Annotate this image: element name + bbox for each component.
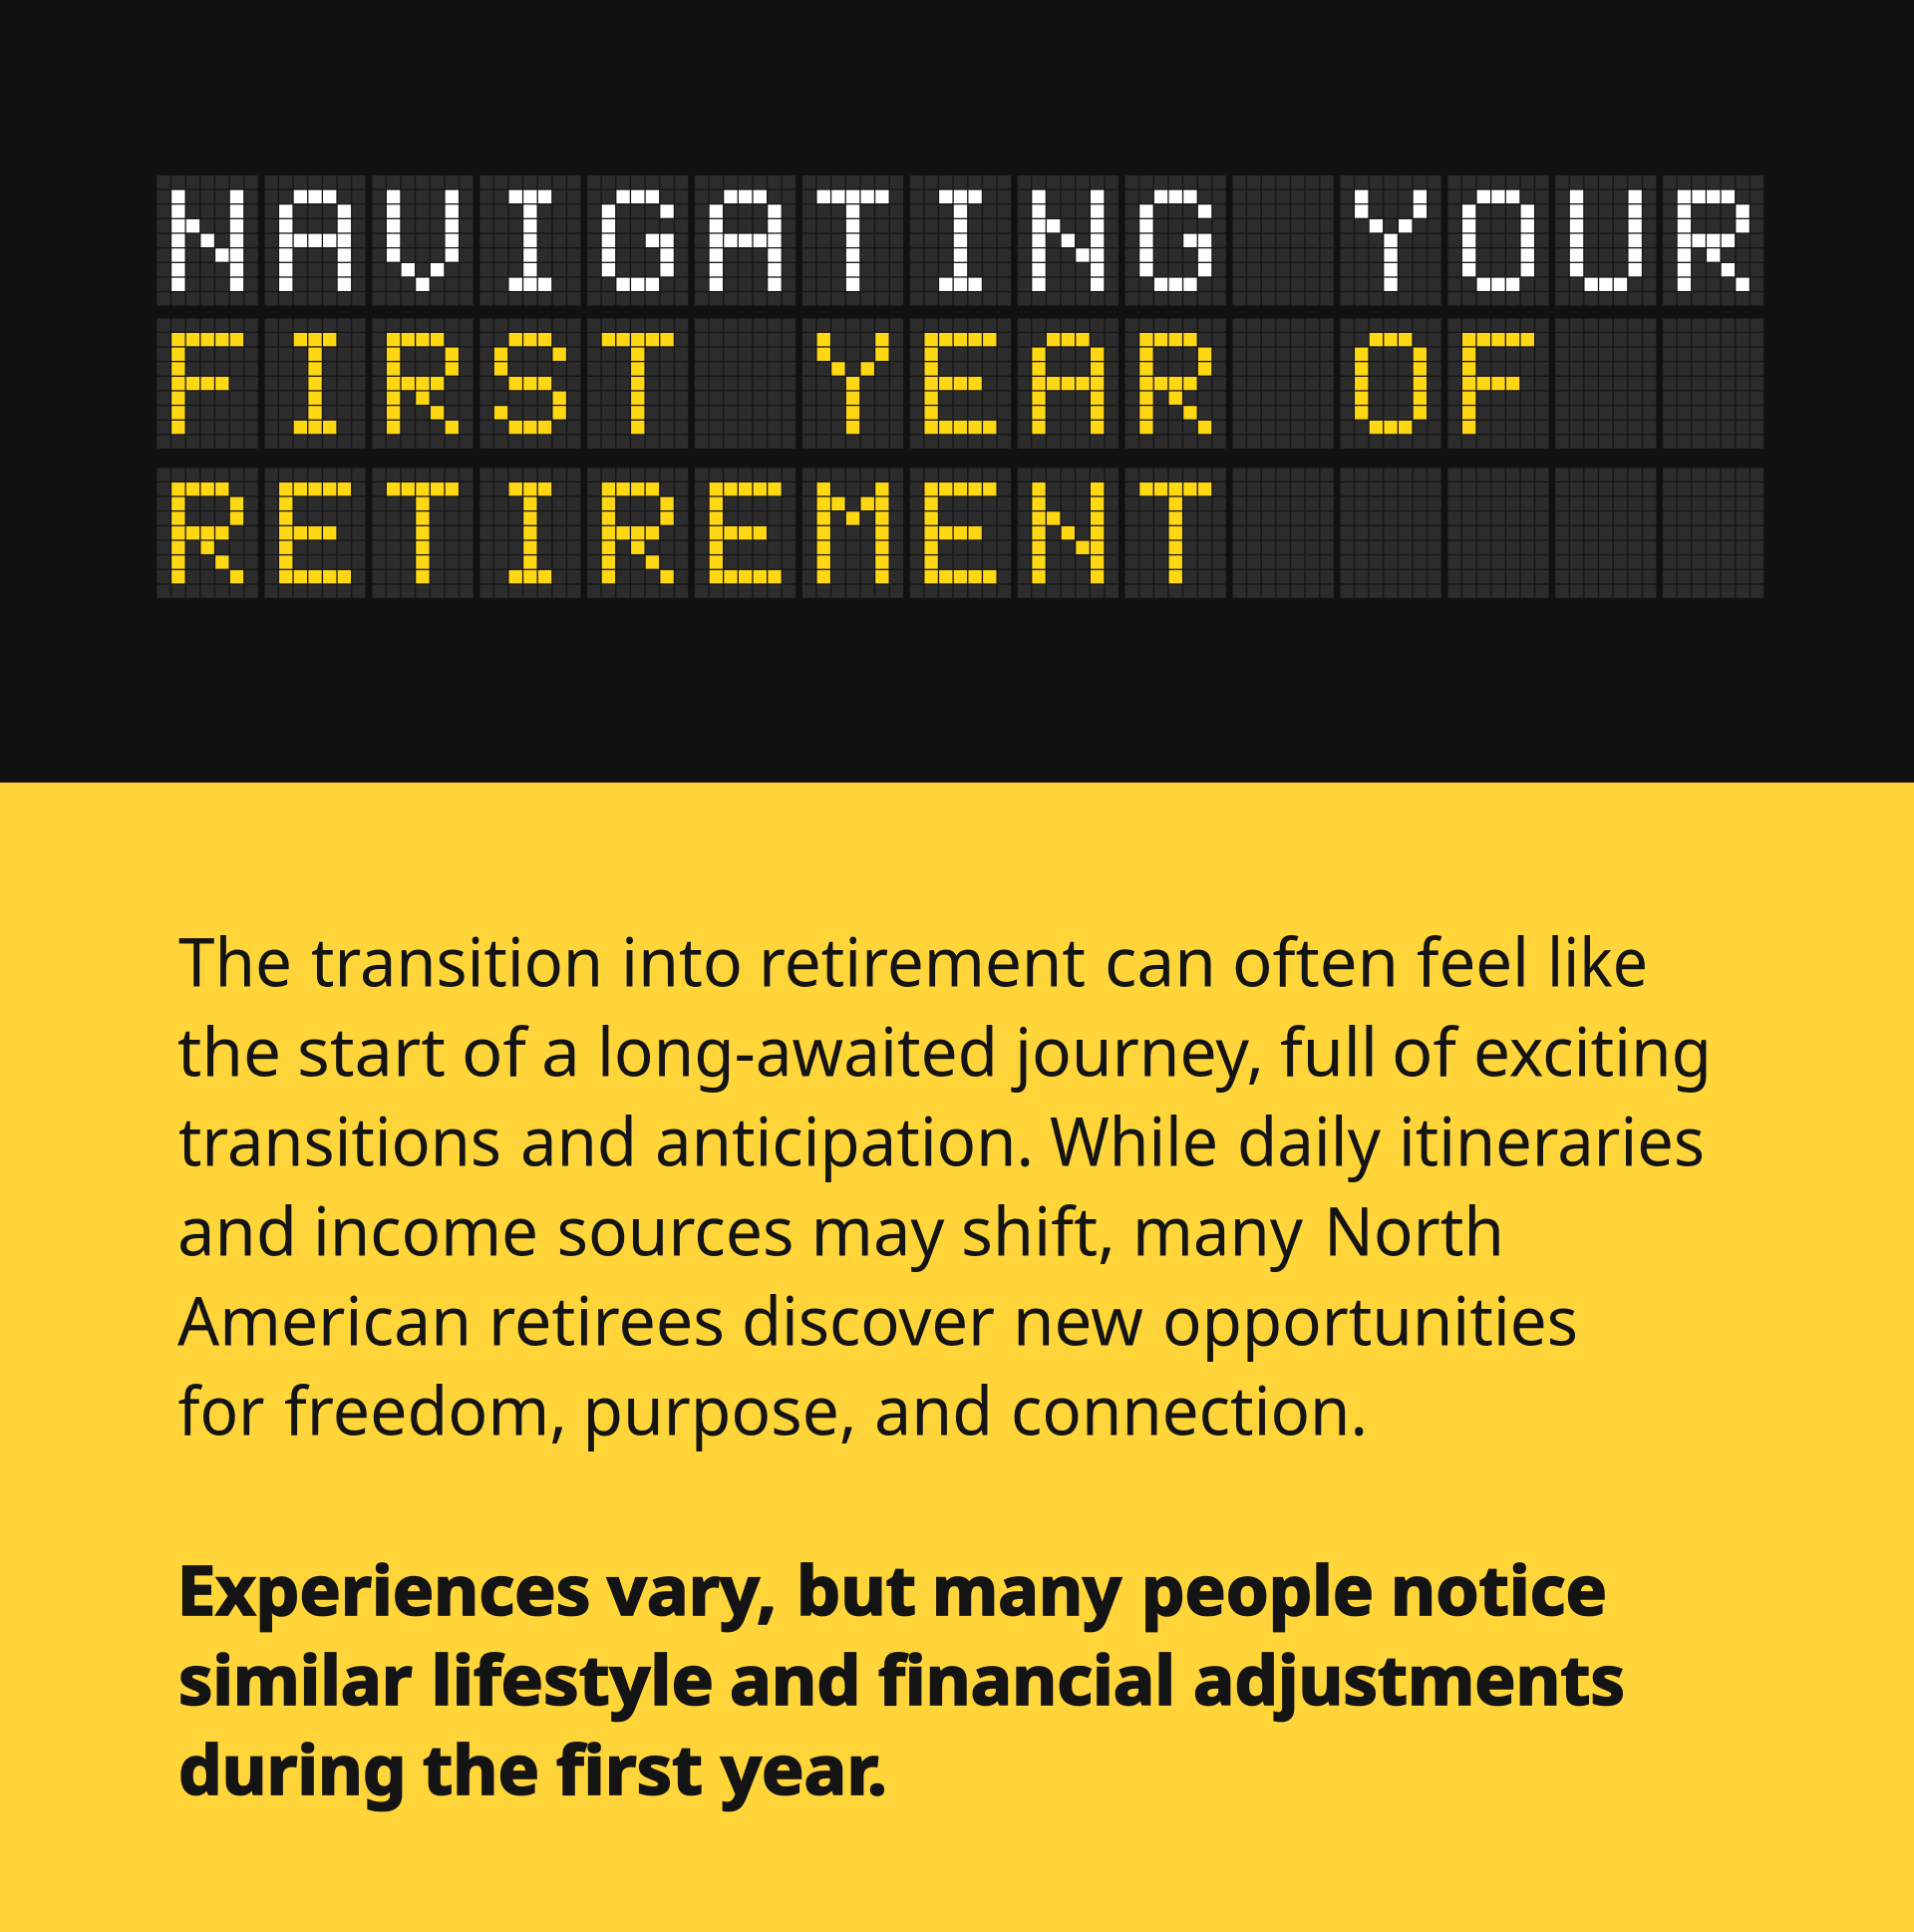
- text block: introduction paragraph: transitions: [178, 1093, 501, 1186]
- text block: introduction paragraph: and: [874, 1362, 993, 1455]
- panel: black header background: [0, 0, 1914, 783]
- text block: introduction paragraph: a: [541, 1003, 580, 1097]
- text block: introduction paragraph: The: [178, 913, 292, 1007]
- text block: introduction paragraph: connection.: [1011, 1362, 1368, 1455]
- text block: introduction paragraph: purpose,: [582, 1362, 857, 1455]
- text block: introduction paragraph: retirees: [488, 1272, 725, 1366]
- text block: introduction paragraph: While: [1050, 1093, 1218, 1186]
- text block: introduction paragraph: long-awaited: [597, 1003, 998, 1097]
- text block: introduction paragraph: itineraries: [1399, 1093, 1705, 1186]
- text block: bold closing statement: similar: [178, 1632, 413, 1725]
- text block: introduction paragraph: may: [811, 1182, 945, 1276]
- text block: introduction paragraph: discover: [742, 1272, 995, 1366]
- text block: introduction paragraph: can: [1105, 913, 1216, 1007]
- text block: introduction paragraph: sources: [556, 1182, 794, 1276]
- text block: introduction paragraph: American: [177, 1272, 472, 1366]
- text block: introduction paragraph: retirement: [759, 913, 1086, 1007]
- text block: introduction paragraph: many: [1132, 1182, 1303, 1276]
- text block: bold closing statement: many: [932, 1542, 1121, 1635]
- text block: introduction paragraph: often: [1232, 913, 1399, 1007]
- text block: bold closing statement: lifestyle: [431, 1632, 714, 1725]
- text block: introduction paragraph: anticipation.: [655, 1093, 1034, 1186]
- text block: introduction paragraph: start: [297, 1003, 446, 1097]
- text block: bold closing statement: Experiences: [177, 1542, 590, 1635]
- text block: introduction paragraph: journey,: [1011, 1003, 1264, 1097]
- text block: bold closing statement: vary,: [607, 1542, 777, 1635]
- text block: introduction paragraph: and: [177, 1182, 297, 1276]
- text block: bold closing statement: during: [178, 1722, 407, 1814]
- text block: bold closing statement: the: [423, 1722, 539, 1814]
- text block: bold closing statement: but: [797, 1542, 916, 1635]
- text block: introduction paragraph: of: [1392, 1003, 1460, 1097]
- text block: introduction paragraph: North: [1324, 1182, 1504, 1276]
- text block: introduction paragraph: transition: [311, 913, 603, 1007]
- text block: introduction paragraph: the: [177, 1003, 281, 1097]
- text block: introduction paragraph: and: [520, 1093, 637, 1186]
- text block: introduction paragraph: full: [1280, 1003, 1378, 1097]
- text block: bold closing statement: year.: [721, 1722, 887, 1814]
- panel: yellow body background: [0, 783, 1914, 1932]
- text block: introduction paragraph: into: [621, 913, 743, 1007]
- text block: introduction paragraph: freedom,: [284, 1362, 567, 1455]
- text block: bold closing statement: financial: [878, 1632, 1175, 1725]
- title: departure board: [158, 175, 1763, 609]
- text block: introduction paragraph: for: [177, 1362, 265, 1455]
- text block: bold closing statement: adjustments: [1193, 1632, 1625, 1725]
- text block: introduction paragraph: feel: [1417, 913, 1529, 1007]
- title line 3: RETIREMENT: [158, 468, 1763, 609]
- text block: bold closing statement: first: [556, 1722, 703, 1814]
- text block: introduction paragraph: income: [313, 1182, 538, 1276]
- text block: introduction paragraph: daily: [1237, 1093, 1381, 1186]
- text block: introduction paragraph: opportunities: [1162, 1272, 1578, 1366]
- text block: bold closing statement: and: [730, 1632, 861, 1725]
- text block: bold closing statement: [177, 1542, 1625, 1814]
- text block: introduction paragraph: new: [1013, 1272, 1143, 1366]
- text block: bold closing statement: notice: [1391, 1542, 1607, 1635]
- text block: introduction paragraph: exciting: [1473, 1003, 1712, 1097]
- text block: bold closing statement: people: [1141, 1542, 1374, 1635]
- text block: introduction paragraph: [177, 913, 1712, 1455]
- text block: introduction paragraph: shift,: [961, 1182, 1116, 1276]
- text block: introduction paragraph: like: [1547, 913, 1648, 1007]
- text block: introduction paragraph: of: [462, 1003, 530, 1097]
